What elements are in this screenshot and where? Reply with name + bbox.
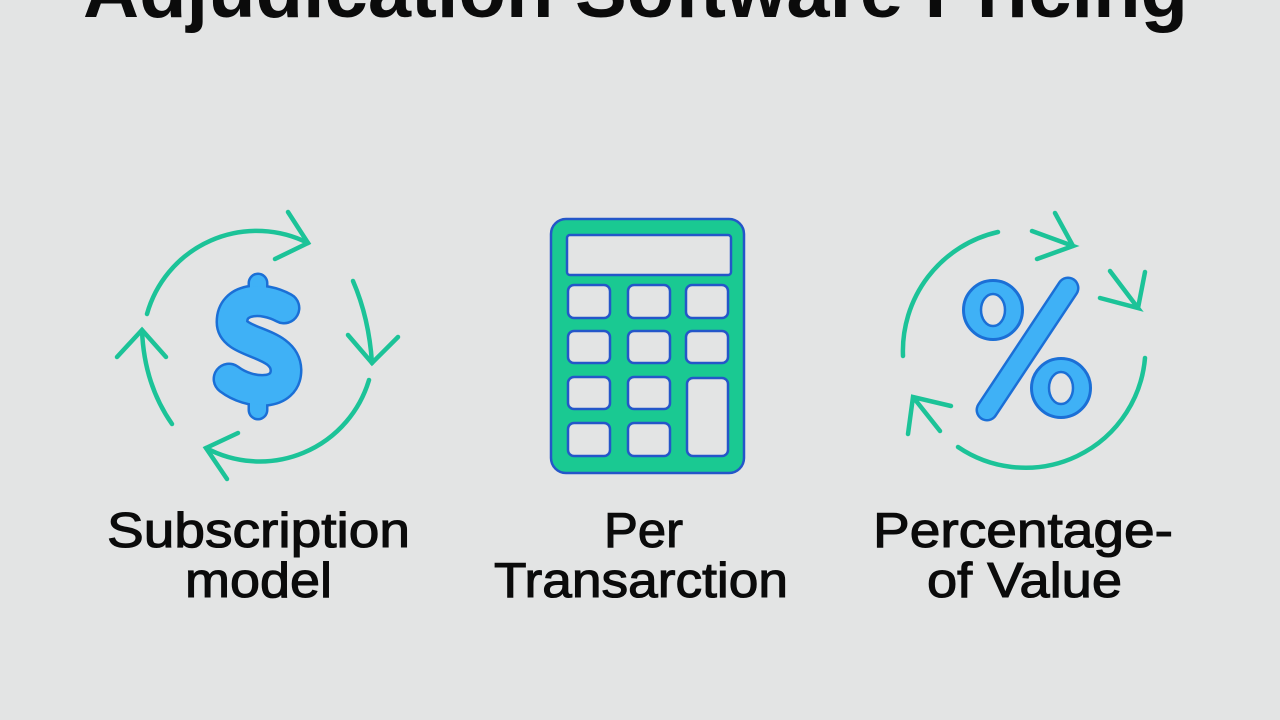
label: subscription model [107, 504, 410, 608]
icon: cycle arrows around dollar [117, 212, 398, 479]
label: per transaction: Transarction [494, 554, 788, 608]
label: percentage of value [873, 504, 1173, 608]
label: subscription model: Subscription [107, 504, 410, 558]
icon: calculator [551, 219, 744, 473]
label: subscription model: model [185, 554, 332, 608]
label: per transaction: Per [604, 504, 683, 558]
label: per transaction [494, 504, 788, 608]
icon: cycle arrows around percent [903, 213, 1145, 468]
label: percentage of value: of Value [927, 554, 1122, 608]
icon: percent sign [964, 280, 1090, 418]
label: percentage of value: Percentage- [873, 504, 1173, 558]
panel: per transaction [494, 219, 788, 608]
panel: subscription model [107, 212, 410, 608]
panel: percentage of value [873, 213, 1173, 608]
icon: dollar sign [229, 283, 286, 410]
